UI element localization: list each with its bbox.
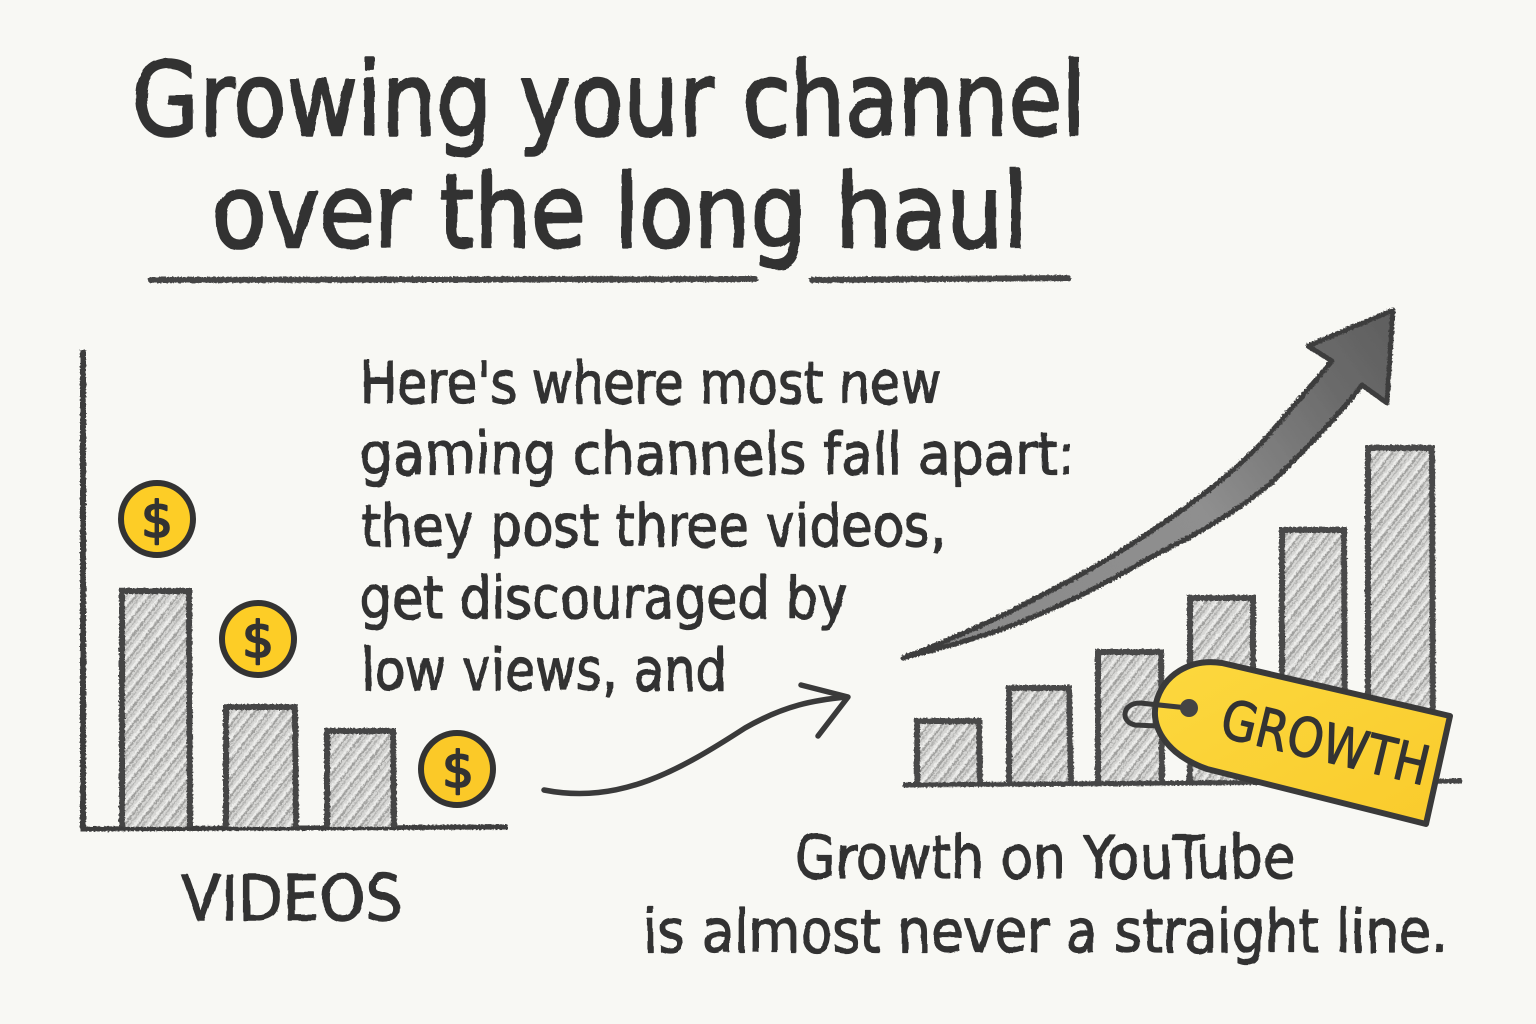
body paragraph: they post three videos, bbox=[361, 492, 946, 560]
tag string bbox=[1125, 703, 1188, 726]
caption bbox=[643, 823, 1448, 967]
chart axes bbox=[80, 350, 508, 830]
coin 2: $ bbox=[242, 611, 274, 669]
title bbox=[132, 41, 1086, 272]
coin 3 bbox=[421, 733, 493, 805]
caption: Growth on YouTube bbox=[795, 823, 1295, 893]
title: over the long haul bbox=[212, 153, 1028, 272]
tag: growth bbox=[1125, 662, 1450, 824]
baseline bbox=[903, 781, 1462, 785]
body paragraph: Here's where most new bbox=[360, 349, 941, 417]
caption: is almost never a straight line. bbox=[643, 897, 1448, 967]
bars bbox=[122, 591, 394, 827]
coin 1: $ bbox=[141, 491, 173, 549]
body paragraph bbox=[360, 349, 1075, 704]
body paragraph: gaming channels fall apart: bbox=[360, 420, 1075, 488]
rising arrow bbox=[903, 310, 1393, 658]
coin 3: $ bbox=[442, 741, 474, 799]
title: Growing your channel bbox=[132, 41, 1086, 160]
body paragraph: get discouraged by bbox=[360, 564, 848, 632]
label: videos: VIDEOS bbox=[181, 862, 402, 935]
declining bar chart bbox=[80, 350, 508, 830]
bars bbox=[917, 448, 1433, 783]
title underline bbox=[151, 278, 1068, 280]
growth bar chart bbox=[903, 310, 1462, 824]
coin 2 bbox=[222, 603, 294, 675]
tag label: GROWTH bbox=[1215, 687, 1436, 798]
coin 1 bbox=[121, 483, 193, 555]
connecting arrow bbox=[544, 685, 848, 794]
tag hole bbox=[1180, 699, 1198, 717]
body paragraph: low views, and bbox=[361, 636, 727, 704]
